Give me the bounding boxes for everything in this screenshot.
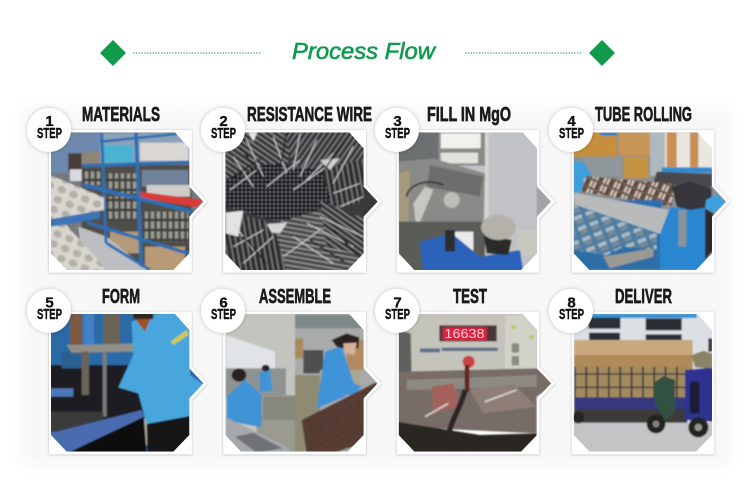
step badge 8: STEP [559,307,584,323]
heading: deliver: DELIVER [615,286,672,308]
dotted rule right [465,52,581,54]
title: Process Flow [292,38,437,64]
card frame [397,130,555,273]
photo: loaded delivery truck [574,314,712,452]
step badge 6 [201,289,245,333]
photo: workers assembling [220,312,382,455]
panel: step 4 tube rolling [549,104,733,273]
step badge 2: 2 [219,113,228,130]
icon: right green diamond [589,40,615,66]
step badge 1 [27,108,71,152]
panel: step 1 materials [27,104,207,273]
step badge 4: 4 [567,113,576,130]
heading: resistance wire: RESISTANCE WIRE [247,104,372,126]
heading: fill in MgO: FILL IN MgO [427,104,511,126]
card frame [223,312,382,454]
step badge 2: STEP [211,126,236,142]
dotted rule left [133,52,261,54]
photo: test instrument [393,312,557,453]
photo: tube rolling machines [574,132,726,270]
step badge 1: STEP [37,126,62,142]
panel: step 7 test [375,286,557,454]
title bar [100,38,615,66]
step badge 4 [549,108,593,152]
step badge 3 [375,108,419,152]
heading: assemble: ASSEMBLE [259,286,331,308]
heading: form: FORM [102,286,140,308]
card frame [49,312,207,454]
step badge 6: STEP [211,307,236,323]
panel: step 3 fill in MgO [375,104,557,273]
photo: warehouse shelves [47,130,207,273]
card frame [397,312,555,454]
photo: resistance wires [225,132,378,270]
step badge 6: 6 [219,294,228,312]
step badge 3: STEP [385,126,410,142]
step badge 1: 1 [45,113,54,130]
step badge 5: STEP [37,307,62,323]
heading: tube rolling: TUBE ROLLING [595,104,692,126]
step badge 5 [27,289,71,333]
step badge 3: 3 [393,113,402,130]
card frame [572,130,730,273]
card frame [572,312,714,454]
heading: test: TEST [453,286,487,308]
panel: step 5 form [27,286,210,455]
step badge 7: 7 [393,294,402,312]
panel: step 8 deliver [549,286,717,456]
step badge 5: 5 [45,294,54,312]
step badge 7 [375,289,419,333]
heading: materials: MATERIALS [82,104,160,126]
step badge 4: STEP [559,126,584,142]
icon: left green diamond [100,40,126,66]
step badge 7: STEP [385,307,410,323]
step badge 8 [549,289,593,333]
step badge 2 [201,108,245,152]
step badge 8: 8 [567,294,576,312]
card frame [49,130,207,273]
panel: step 2 resistance wire [201,104,383,273]
card frame [223,130,382,273]
display reading: 16638 [444,327,485,341]
photo: worker at forming press [51,314,204,452]
panel: step 6 assemble [201,286,382,455]
photo: worker filling machine [398,132,551,270]
